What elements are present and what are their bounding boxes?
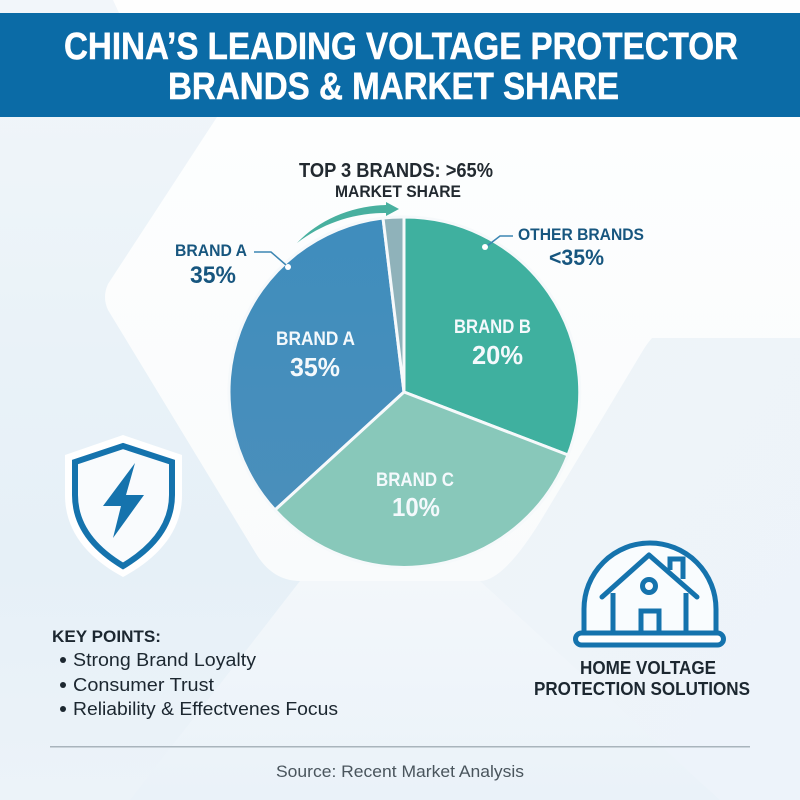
- key points: Strong Brand Loyalty: [73, 649, 257, 670]
- icon caption: [534, 658, 750, 699]
- pie label: Brand C: BRAND C: [376, 470, 454, 491]
- callout: Brand A 35%: BRAND A: [175, 241, 247, 260]
- key points: KEY POINTS:: [52, 627, 161, 646]
- arrow: top 3 share: [297, 202, 399, 243]
- pie label: Brand A: BRAND A: [276, 329, 355, 350]
- pie label: Brand B: 20%: [472, 340, 523, 370]
- callout: top 3 brands: [299, 160, 493, 201]
- pie label: Brand C: [376, 470, 454, 522]
- callout: Brand A 35%: [175, 241, 291, 289]
- slice: Brand C 10%: [275, 392, 568, 567]
- pie label: Brand B: [454, 317, 531, 370]
- callout: Other brands: [482, 225, 644, 270]
- slice: other sliver: [383, 217, 404, 392]
- icon: house under dome: [576, 543, 724, 645]
- divider: [50, 746, 750, 748]
- icon caption: PROTECTION SOLUTIONS: [534, 679, 750, 699]
- callout: Brand A 35%: 35%: [190, 262, 236, 289]
- icon caption: HOME VOLTAGE: [580, 658, 716, 678]
- key points: Consumer Trust: [73, 674, 214, 695]
- callout: top 3 brands: TOP 3 BRANDS: >65%: [299, 160, 493, 182]
- pie label: Brand A: [276, 329, 355, 382]
- callout: top 3 brands: MARKET SHARE: [335, 182, 461, 201]
- source: Source: Recent Market Analysis: [276, 762, 524, 781]
- slice: Brand A 35%: [229, 218, 404, 510]
- icon: shield with lightning: [65, 435, 182, 577]
- key points: [52, 627, 338, 719]
- callout: Other brands: OTHER BRANDS: [518, 225, 644, 244]
- title banner: [0, 13, 800, 117]
- pie label: Brand A: 35%: [290, 352, 340, 382]
- pie chart: [229, 217, 580, 567]
- title second line: BRANDS & MARKET SHARE: [168, 66, 619, 108]
- key points: Reliability & Effectvenes Focus: [73, 698, 338, 719]
- pie label: Brand C: 10%: [392, 492, 440, 522]
- callout: Other brands: <35%: [549, 245, 604, 270]
- pie label: Brand B: BRAND B: [454, 317, 531, 338]
- slice: Brand B 20%: [404, 217, 580, 455]
